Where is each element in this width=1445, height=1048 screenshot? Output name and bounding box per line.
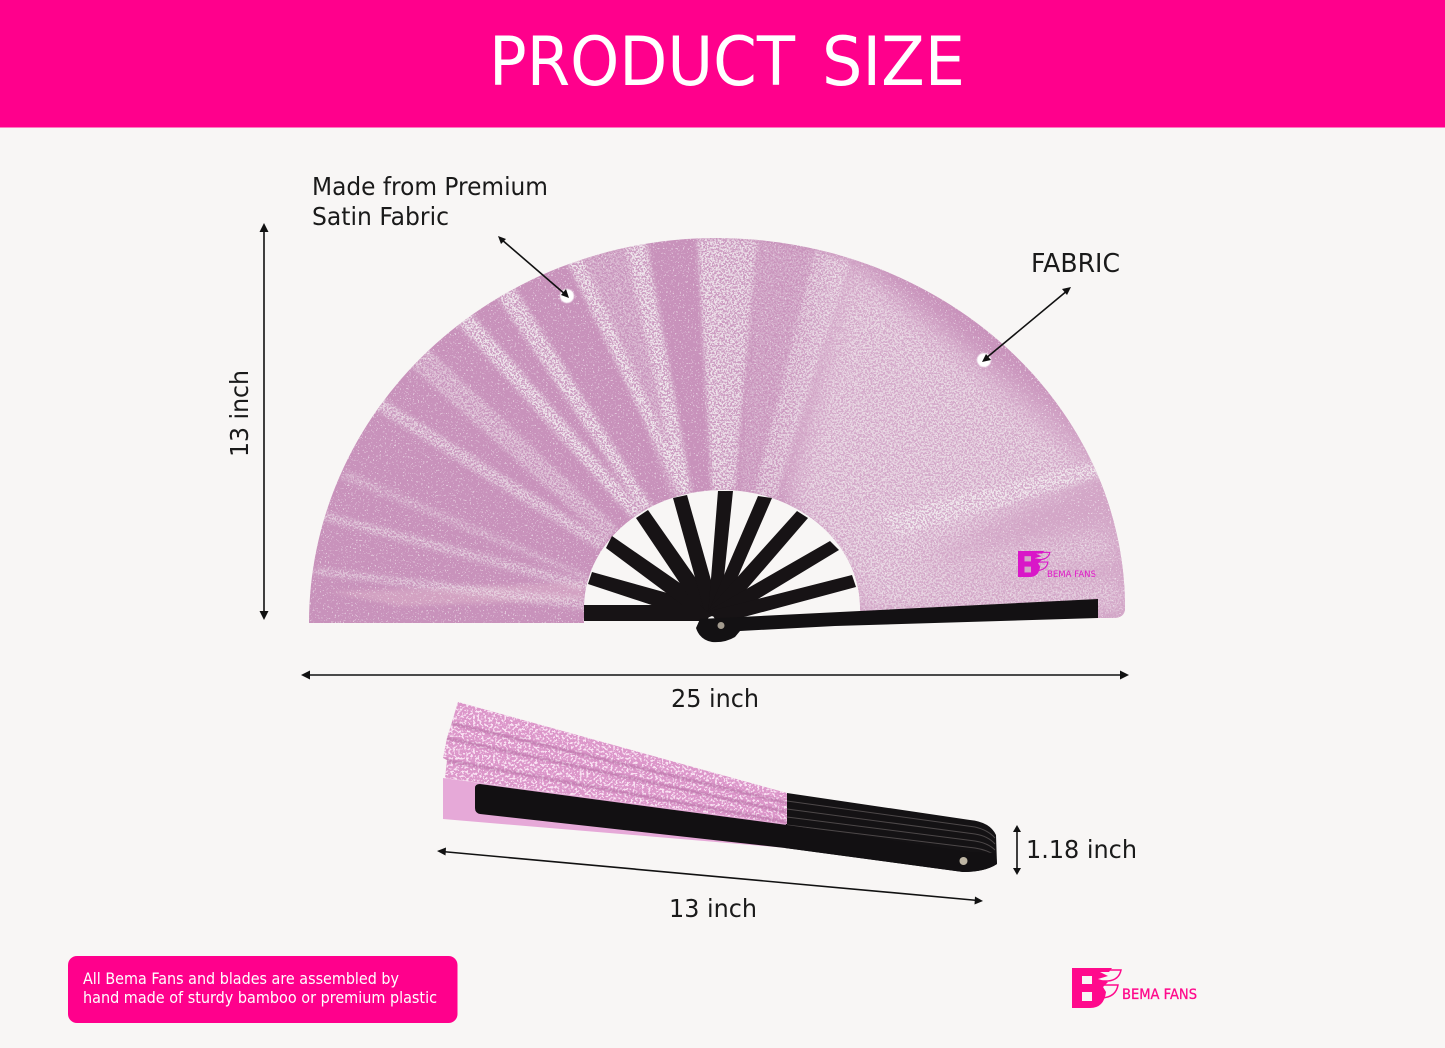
callout dot: premium fabric [560,289,574,303]
closed fan pin [960,857,968,865]
fan fabric [300,230,1140,630]
dimension label: 1.18 inch: 1.18 inch [1026,835,1137,864]
dimension arrow: closed length [437,848,983,904]
callout dot: fabric [977,353,991,367]
dimension arrow: height 13 inch [260,223,268,620]
note text: All Bema Fans and blades are assembled by [83,969,399,988]
logo mark [1072,968,1121,1008]
glitter fabric upper [440,700,790,830]
callout text: made from premium satin fabric: Made from Premium [312,172,548,201]
dimension label: 13 inch height: 13 inch [225,370,254,457]
title: PRODUCT [489,23,795,102]
front guard stick [475,784,997,872]
dimension label: 13 inch length: 13 inch [669,894,757,923]
logo wordmark: BEMA FANS [1122,987,1197,1003]
fan ribs [584,491,856,624]
arrow: fabric callout [982,287,1071,362]
plain pink lower fabric [443,778,787,848]
rib highlights [787,801,996,856]
header banner [0,0,1445,128]
callout text: fabric: FABRIC [1031,249,1120,279]
brand logo [1072,968,1197,1008]
arrow: premium callout [498,236,569,298]
pivot pin [718,622,724,629]
closed fan [440,700,997,872]
black ribs behind fabric [785,793,997,872]
fan guard stick [696,599,1098,642]
dimension arrow: thickness [1013,825,1021,875]
small logo wordmark: BEMA FANS [1047,570,1096,580]
small logo on fabric [1018,551,1050,577]
dimension arrow: width 25 inch [301,670,1129,680]
title: SIZE [822,23,965,102]
callout text: made from premium satin fabric: Satin Fabric [312,202,449,231]
dimension label: 25 inch: 25 inch [671,684,759,713]
callout text: made from premium satin fabric [312,172,548,231]
note box [68,956,458,1023]
open fan [300,230,1140,642]
note box: hand made of sturdy bamboo or premium plastic [83,988,437,1007]
